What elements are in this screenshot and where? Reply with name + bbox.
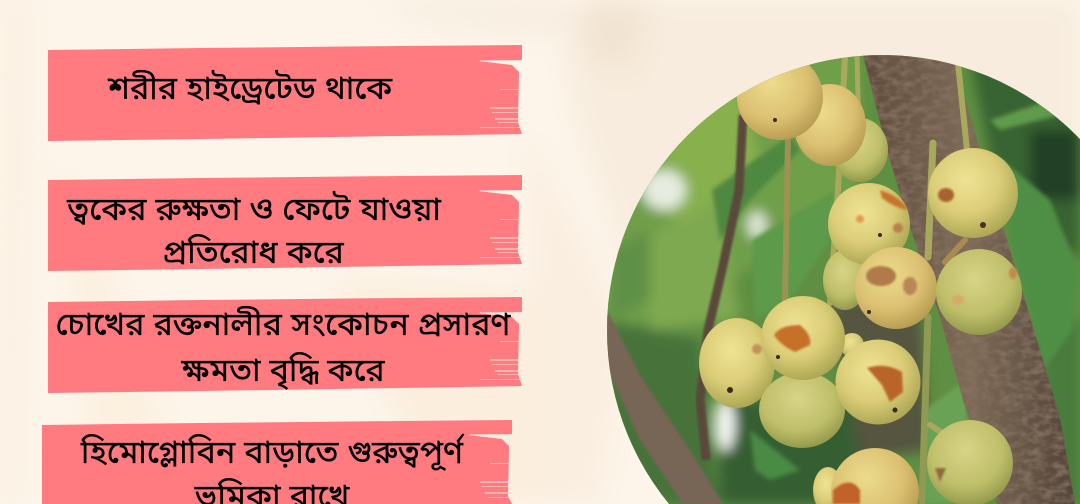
text: skin benefit: ত্বকের রুক্ষতা ও ফেটে যাওয়া	[66, 191, 441, 227]
foliage background	[600, 50, 1080, 504]
panel: brush band 2	[48, 175, 522, 271]
text: eye benefit: চোখের রক্তনালীর সংকোচন প্রসারণ	[55, 306, 511, 342]
fruit: centre blotched	[828, 183, 910, 265]
panel: brush band 1	[48, 45, 522, 141]
text: hemoglobin benefit: হিমোগ্লোবিন বাড়াতে গুরুত্বপূর্ণ	[80, 433, 465, 471]
fruit: mid blotched	[855, 247, 937, 329]
text: skin benefit line 2: প্রতিরোধ করে	[162, 234, 344, 270]
fruit: mid right	[936, 249, 1022, 335]
fruit: top left	[737, 65, 823, 140]
panel: brush band 4	[42, 420, 512, 504]
fruit: lower centre	[836, 340, 920, 424]
lower left branch	[607, 310, 723, 504]
thin dark branch	[700, 115, 743, 460]
text: eye benefit line 2: ক্ষমতা বৃদ্ধি করে	[180, 352, 385, 390]
fruit: bottom right	[927, 420, 1013, 504]
trunk	[863, 55, 1075, 504]
fruit: back cluster	[794, 84, 888, 504]
fruit: large orange spot	[761, 296, 845, 380]
text: hydration benefit: শরীর হাইড্রেটেড থাকে	[107, 70, 393, 106]
stems	[785, 57, 967, 504]
fruit: lower left	[699, 318, 775, 408]
photo: fruit cluster in circle	[600, 50, 1080, 504]
fruit: bottom centre	[831, 448, 919, 504]
fruit: lower back	[759, 372, 845, 448]
fruit: upper right	[928, 148, 1018, 238]
panel: brush band 3	[48, 297, 522, 393]
